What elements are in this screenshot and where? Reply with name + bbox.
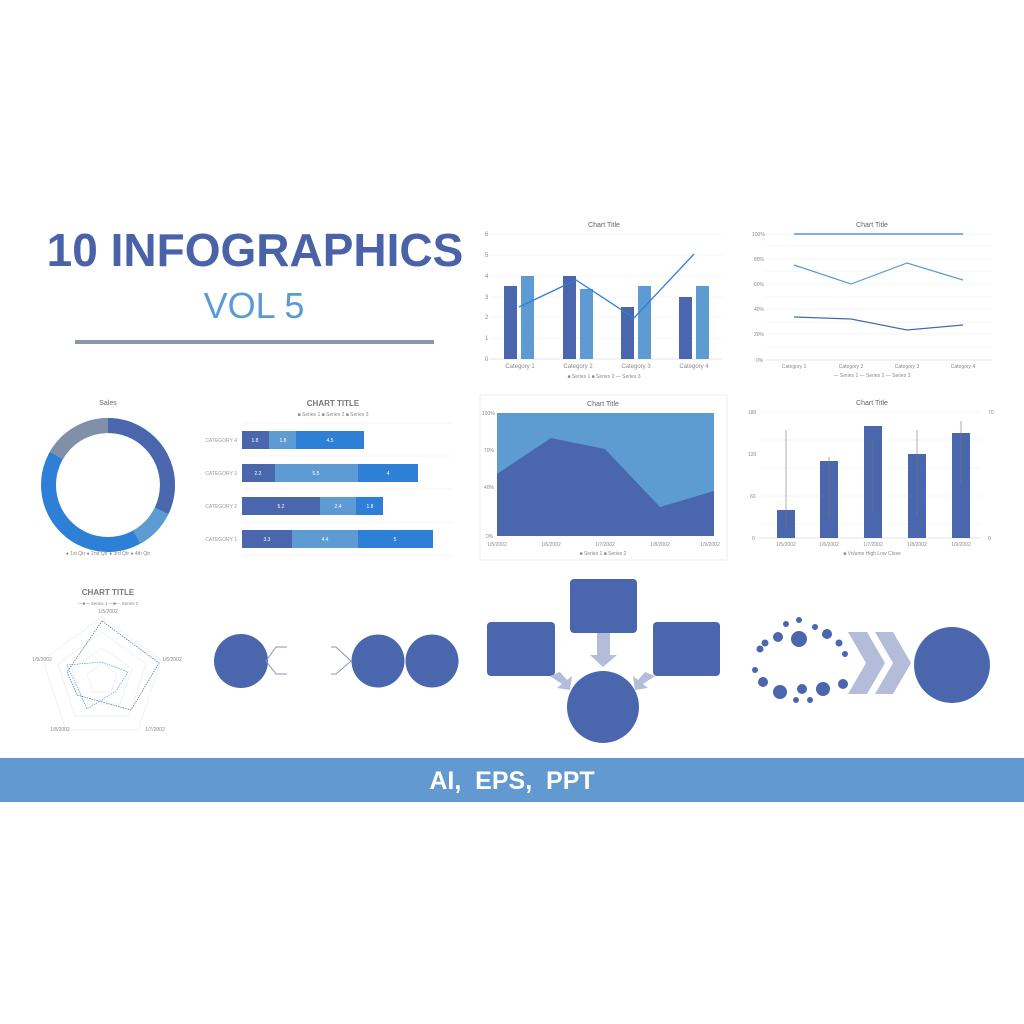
chart: radar: CHART TITLE — [82, 588, 135, 597]
chart: combo bar/line: 6 — [485, 232, 489, 238]
chart: line chart percent: Chart Title — [856, 222, 888, 229]
chart: stacked horizontal bars: 4 — [387, 471, 390, 477]
chart: area chart: 70% — [484, 448, 495, 454]
chart: area chart: ■ Series 1 ■ Series 2 — [580, 551, 627, 557]
chart: line chart percent: Category 3 — [895, 364, 919, 370]
title underline — [75, 340, 434, 344]
chart: stacked horizontal bars: 1.8 — [280, 438, 287, 444]
chart: stacked horizontal bars: 2.4 — [335, 504, 342, 510]
chart: stock volume: 1/6/2002 — [819, 542, 839, 548]
chart: radar: 1/8/2002 — [50, 727, 70, 733]
chart: stacked horizontal bars: 4.5 — [327, 438, 334, 444]
chart: line chart percent: Category 4 — [951, 364, 975, 370]
chart: area chart: 1/7/2002 — [595, 542, 615, 548]
diagram: dots ring to circle — [752, 617, 990, 703]
chart: stacked horizontal bars: CHART TITLE — [307, 399, 360, 408]
chart: stacked horizontal bars: 1.8 — [367, 504, 374, 510]
chart: stock volume — [748, 400, 994, 557]
chart: combo bar/line: 4 — [485, 274, 489, 280]
chart: donut Sales — [48, 400, 168, 557]
chart: combo bar/line: 0 — [485, 357, 489, 363]
title — [47, 224, 463, 326]
chart: stacked horizontal bars: 3.3 — [264, 537, 271, 543]
chart: stock volume: 1/8/2002 — [907, 542, 927, 548]
chart: combo bar/line: 5 — [485, 253, 489, 259]
chart: area chart: 40% — [484, 485, 495, 491]
chart: stock volume: 1/9/2002 — [951, 542, 971, 548]
chart: combo bar/line: Category 3 — [621, 364, 651, 370]
chart: area chart — [480, 395, 727, 560]
subtitle: VOL 5 — [204, 285, 304, 326]
chart: combo bar/line: Category 1 — [505, 364, 535, 370]
chart: radar: 1/9/2002 — [32, 657, 52, 663]
chart: stock volume: 0 — [988, 536, 991, 542]
chart: radar: 1/6/2002 — [162, 657, 182, 663]
chart: area chart: 100% — [482, 411, 495, 417]
chart: stock volume: 180 — [748, 410, 757, 416]
chart: radar: 1/7/2002 — [145, 727, 165, 733]
chart: stacked horizontal bars: 1.8 — [252, 438, 259, 444]
chart: stacked horizontal bars: 5 — [394, 537, 397, 543]
chart: combo bar/line: ■ Series 1 ■ Series 2 — Series 3 — [567, 374, 641, 380]
chart: combo bar/line: 2 — [485, 315, 489, 321]
chart: donut Sales: ● 1st Qtr ● 2nd Qtr ● 3rd Qtr ● 4th Qtr — [66, 551, 150, 557]
chart: combo bar/line: Chart Title — [588, 222, 620, 229]
chart: stacked horizontal bars: 2.2 — [255, 471, 262, 477]
chart: stacked horizontal bars: 5.2 — [278, 504, 285, 510]
chart: area chart: 1/8/2002 — [650, 542, 670, 548]
banner: formats: AI, EPS, PPT — [429, 767, 595, 795]
chart: line chart percent: 40% — [754, 307, 765, 313]
chart: area chart: 1/5/2002 — [487, 542, 507, 548]
chart: combo bar/line: Category 2 — [563, 364, 593, 370]
chart: line chart percent: 80% — [754, 257, 765, 263]
chart: line chart percent: Category 1 — [782, 364, 806, 370]
chart: area chart: 0% — [486, 534, 494, 540]
chart: area chart: 1/6/2002 — [541, 542, 561, 548]
chart: stacked horizontal bars: CATEGORY 2 — [205, 504, 237, 510]
title: 10 INFOGRAPHICS — [47, 224, 463, 276]
chart: donut Sales: Sales — [99, 400, 117, 407]
chart: area chart: Chart Title — [587, 401, 619, 408]
chart: line chart percent — [752, 222, 992, 379]
chart: combo bar/line: Category 4 — [679, 364, 709, 370]
chart: stacked horizontal bars: CATEGORY 3 — [205, 471, 237, 477]
chart: combo bar/line: 1 — [485, 336, 489, 342]
chart: stacked horizontal bars: 4.4 — [322, 537, 329, 543]
chart: radar: —■— Series 1 —■— Series 2 — [78, 601, 139, 606]
chart: combo bar/line — [485, 222, 722, 380]
chart: stacked horizontal bars: ■ Series 1 ■ Series 2 ■ Series 3 — [297, 412, 369, 418]
chart: stacked horizontal bars: 5.5 — [313, 471, 320, 477]
diagram: circles with brackets — [214, 634, 458, 688]
chart: line chart percent: Category 2 — [839, 364, 863, 370]
chart: stock volume: 1/7/2002 — [863, 542, 883, 548]
chart: combo bar/line: 3 — [485, 295, 489, 301]
chart: stock volume: 1/5/2002 — [776, 542, 796, 548]
chart: radar — [32, 588, 182, 733]
chart: line chart percent: 20% — [754, 332, 765, 338]
diagram: converging flow — [487, 579, 720, 743]
chart: stock volume: 60 — [750, 494, 756, 500]
chart: stock volume: ■ Volume High Low Close — [843, 551, 901, 557]
chart: stacked horizontal bars — [205, 399, 452, 555]
chart: line chart percent: — Series 1 — Series 2 — Series 3 — [834, 373, 911, 379]
chart: stock volume: Chart Title — [856, 400, 888, 407]
chart: line chart percent: 60% — [754, 282, 765, 288]
chart: stock volume: 70 — [988, 410, 994, 416]
chart: line chart percent: 100% — [752, 232, 765, 238]
chart: stock volume: 120 — [748, 452, 757, 458]
chart: stacked horizontal bars: CATEGORY 4 — [205, 438, 237, 444]
chart: radar: 1/5/2002 — [98, 609, 118, 615]
chart: stock volume: 0 — [752, 536, 755, 542]
chart: stacked horizontal bars: CATEGORY 1 — [205, 537, 237, 543]
chart: line chart percent: 0% — [756, 358, 764, 364]
banner: formats — [0, 758, 1024, 802]
chart: area chart: 1/9/2002 — [700, 542, 720, 548]
